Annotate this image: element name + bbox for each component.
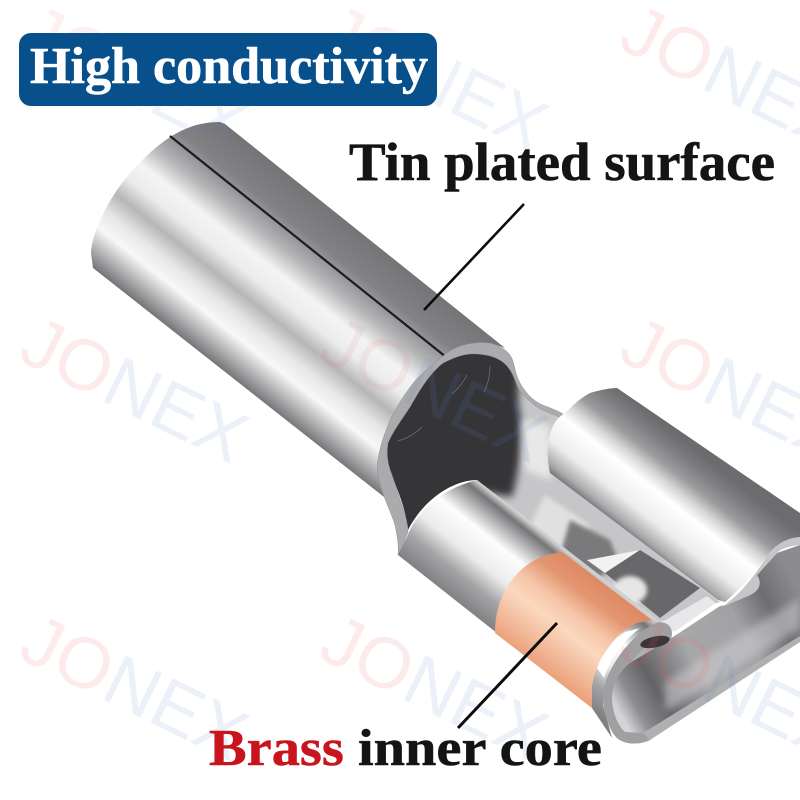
watermarks: JONEX xyxy=(309,301,560,479)
watermarks: JONEX xyxy=(9,301,260,479)
leader line: tin plated surface xyxy=(424,204,524,310)
lower contact roll xyxy=(398,480,660,738)
plate bright strip xyxy=(662,596,716,632)
wave rim xyxy=(727,537,800,605)
barrel seam line xyxy=(170,136,446,357)
label: tin plated surface: Tin plated surface xyxy=(349,132,775,192)
terminal plate silhouette xyxy=(603,545,800,744)
interior of the barrel xyxy=(387,354,720,622)
title badge: High conductivity xyxy=(30,38,428,95)
copper core section xyxy=(495,552,652,708)
crimp hole xyxy=(639,634,671,650)
connector illustration xyxy=(91,122,800,750)
watermarks: JONEX xyxy=(309,599,560,777)
watermarks: JONEX xyxy=(9,599,260,777)
leader line: brass inner core xyxy=(458,623,557,728)
upper contact roll xyxy=(548,388,800,602)
tip rim xyxy=(603,622,672,744)
tube barrel xyxy=(91,122,505,497)
plate inner surface xyxy=(612,545,800,732)
roll end highlight xyxy=(597,628,640,678)
label: brass inner core: Brass inner core xyxy=(209,720,602,777)
flange rim xyxy=(377,343,563,555)
